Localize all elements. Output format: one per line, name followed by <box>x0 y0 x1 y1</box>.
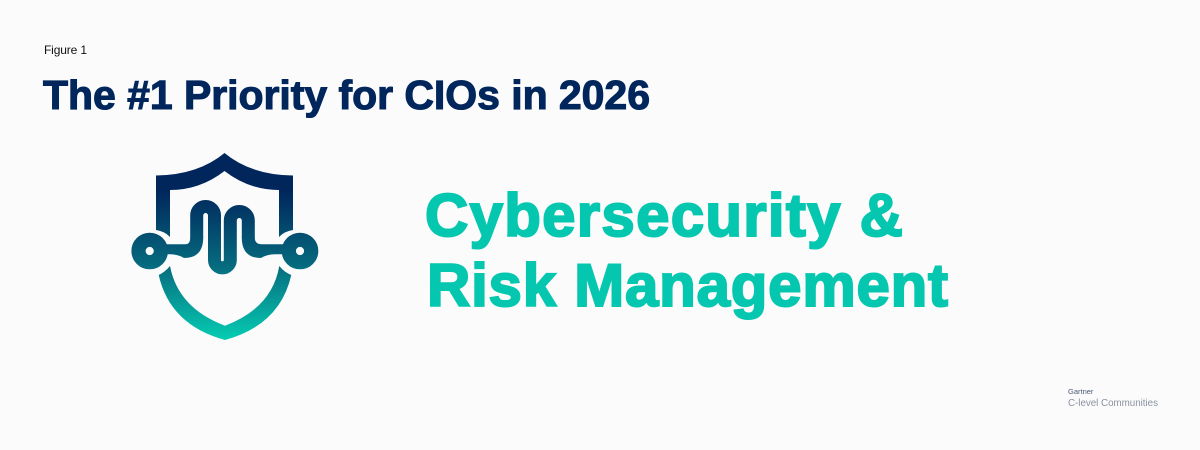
title: The #1 Priority for CIOs in 2026 <box>43 72 650 118</box>
right circuit node <box>289 240 311 262</box>
figure label: Figure 1 <box>44 43 87 57</box>
headline: risk management: Risk Management <box>427 252 948 319</box>
left circuit node <box>138 240 161 262</box>
headline: cybersecurity: Cybersecurity & <box>425 182 903 249</box>
icon: shield with circuit <box>138 153 311 340</box>
shield upper part <box>156 153 293 237</box>
brand: Gartner: Gartner <box>1068 387 1094 396</box>
right trace connector <box>242 238 290 258</box>
circuit trace <box>197 206 248 268</box>
brand: C-level Communities: C-level Communities <box>1068 398 1158 409</box>
shield lower part <box>159 266 291 340</box>
left trace connector <box>160 238 203 258</box>
